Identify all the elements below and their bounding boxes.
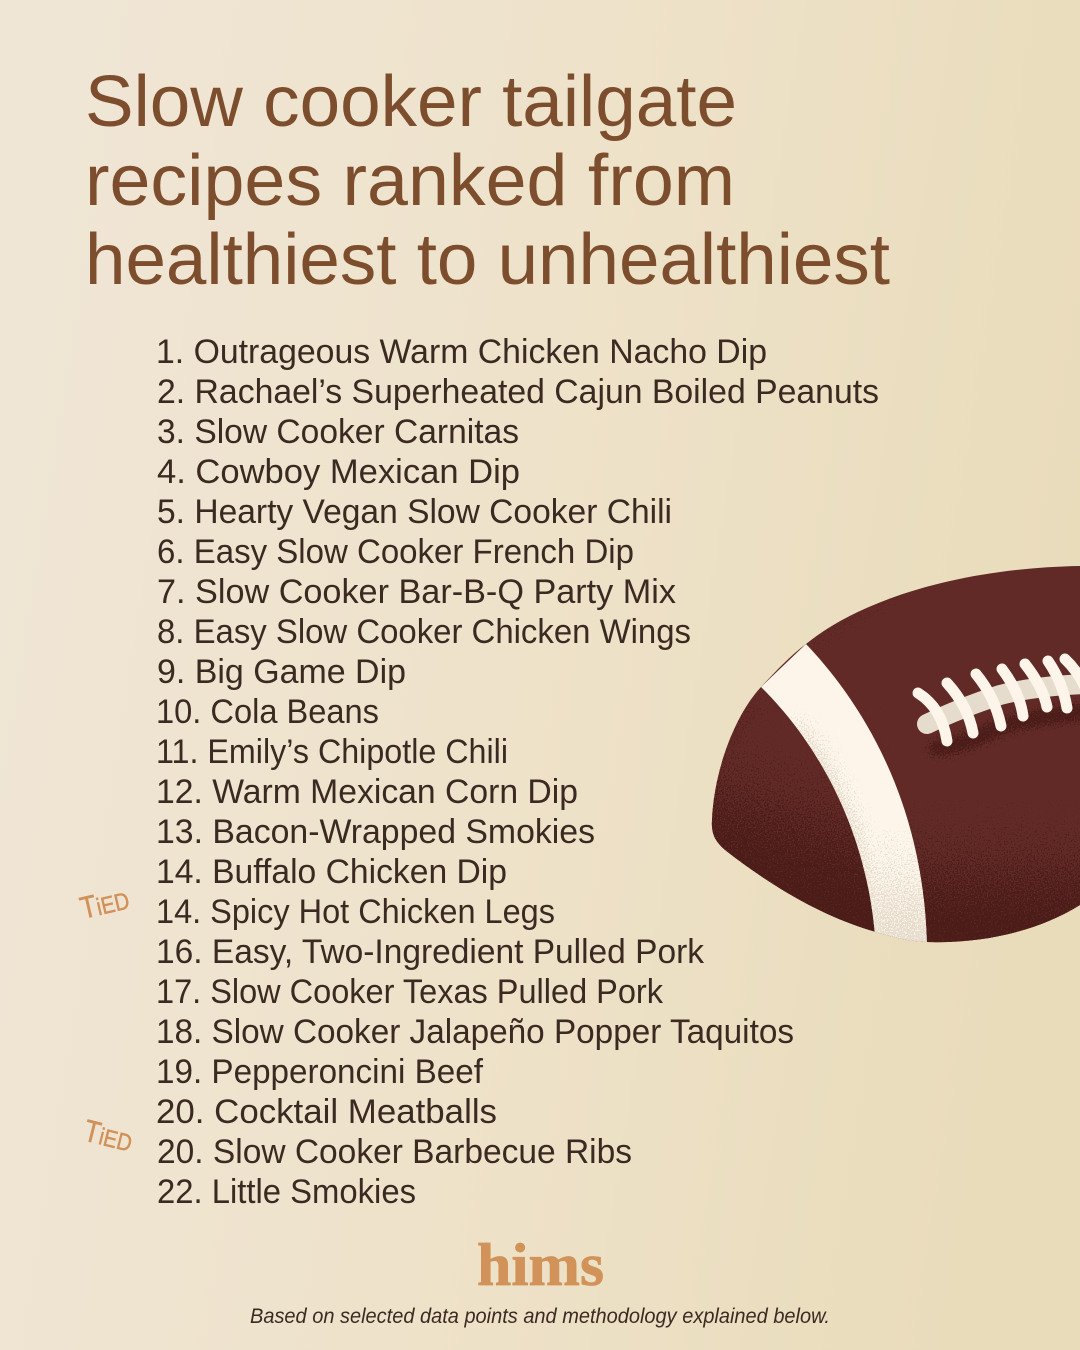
- ranked recipe list: 8. Easy Slow Cooker Chicken Wings: [157, 613, 691, 651]
- ranked recipe list: 3. Slow Cooker Carnitas: [157, 413, 519, 451]
- ranked recipe list: 13. Bacon-Wrapped Smokies: [156, 813, 595, 851]
- footnote: Based on selected data points and methodology explained below.: [250, 1305, 830, 1328]
- lace stitches: [918, 659, 1080, 741]
- title: recipes ranked from: [85, 141, 735, 221]
- ranked recipe list: 10. Cola Beans: [156, 693, 379, 731]
- lace shadow: [936, 712, 1080, 749]
- ranked recipe list: 6. Easy Slow Cooker French Dip: [157, 533, 634, 571]
- ranked recipe list: 7. Slow Cooker Bar-B-Q Party Mix: [157, 573, 676, 611]
- ranked recipe list: 9. Big Game Dip: [157, 653, 406, 691]
- handwritten tied note, first: TiED: [77, 881, 132, 926]
- ranked recipe list: 14. Spicy Hot Chicken Legs: [156, 893, 555, 931]
- hims logo: hims: [477, 1232, 604, 1298]
- handwritten tied note, second: TiED: [80, 1113, 136, 1159]
- title: Slow cooker tailgate: [85, 62, 737, 142]
- ranked recipe list: 14. Buffalo Chicken Dip: [156, 853, 507, 891]
- ranked recipe list: 1. Outrageous Warm Chicken Nacho Dip: [156, 333, 767, 371]
- ranked recipe list: 20. Slow Cooker Barbecue Ribs: [157, 1133, 632, 1171]
- ranked recipe list: [156, 333, 879, 1211]
- ranked recipe list: 18. Slow Cooker Jalapeño Popper Taquitos: [156, 1013, 794, 1051]
- lace bar: [927, 684, 1080, 724]
- ranked recipe list: 5. Hearty Vegan Slow Cooker Chili: [157, 493, 672, 531]
- ranked recipe list: 2. Rachael’s Superheated Cajun Boiled Peanuts: [157, 373, 879, 411]
- ranked recipe list: 12. Warm Mexican Corn Dip: [156, 773, 578, 811]
- ranked recipe list: 22. Little Smokies: [157, 1173, 416, 1211]
- ranked recipe list: 16. Easy, Two-Ingredient Pulled Pork: [156, 933, 705, 971]
- title: [85, 62, 890, 300]
- ranked recipe list: 19. Pepperoncini Beef: [156, 1053, 484, 1091]
- ranked recipe list: 4. Cowboy Mexican Dip: [157, 453, 520, 491]
- ranked recipe list: 20. Cocktail Meatballs: [156, 1093, 497, 1131]
- icon: football: [712, 566, 1080, 942]
- ranked recipe list: 11. Emily’s Chipotle Chili: [156, 733, 508, 771]
- title: healthiest to unhealthiest: [85, 220, 890, 300]
- ranked recipe list: 17. Slow Cooker Texas Pulled Pork: [156, 973, 664, 1011]
